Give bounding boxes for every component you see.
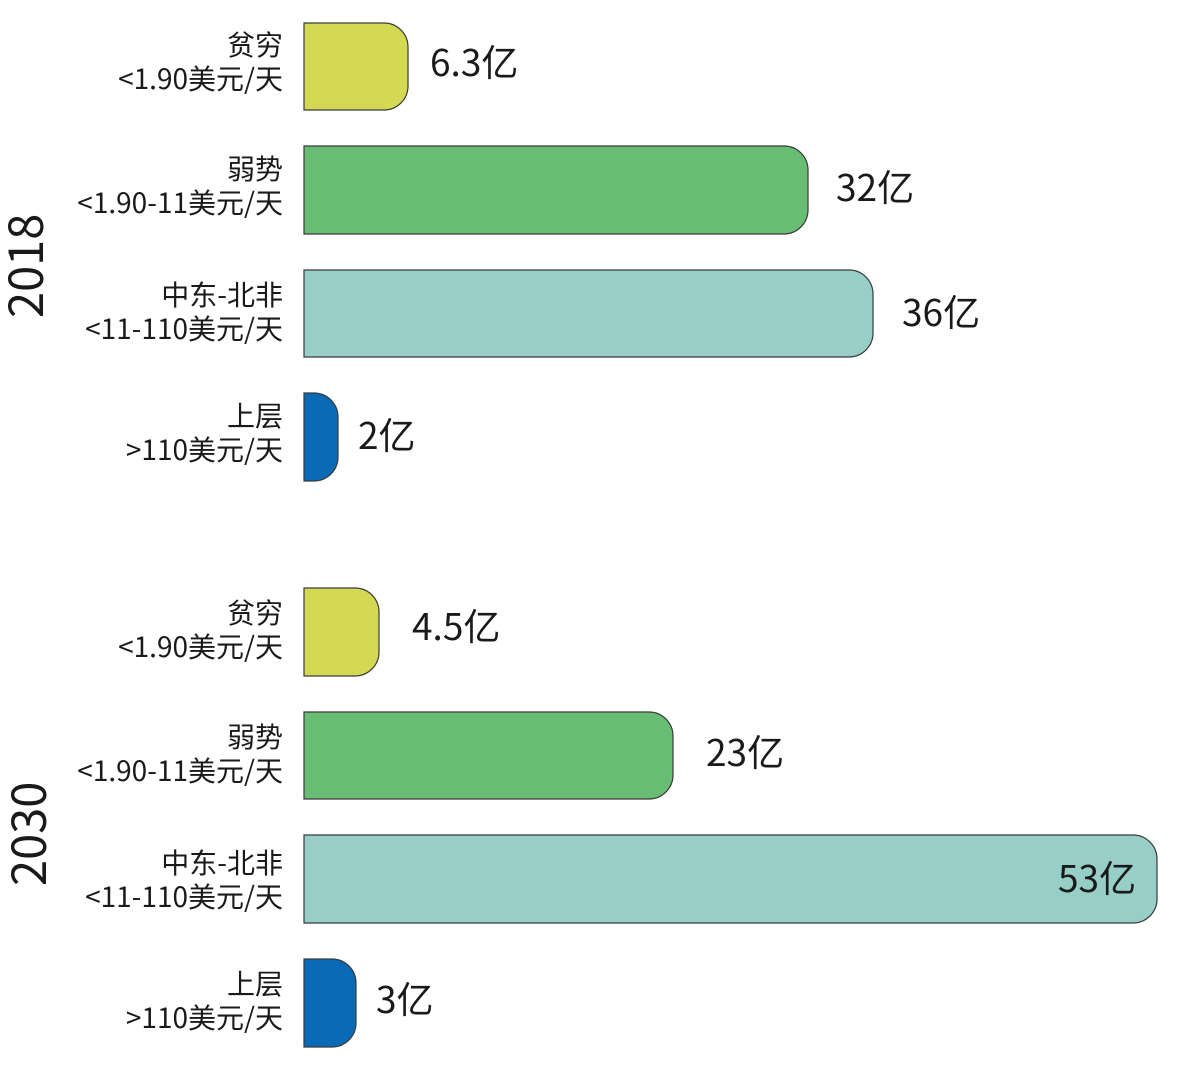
bar group: upper 2018: 2亿 [358, 406, 416, 460]
bar group: vulnerable 2030 [77, 712, 784, 799]
bar group: poor 2030: 4.5亿 [412, 597, 500, 651]
bar group: poor 2030 [118, 588, 500, 676]
bar group: upper 2030: 上层 [227, 963, 283, 1003]
bar group: vulnerable 2030: 23亿 [706, 723, 784, 777]
bar group: poor 2030: <1.90美元/天 [118, 626, 283, 666]
bar group: upper 2030: >110美元/天 [126, 997, 283, 1037]
bar group: middle 2018 [85, 270, 980, 357]
bar group: upper 2018: 上层 [227, 395, 283, 435]
bar group: middle 2018: <11-110美元/天 [85, 308, 283, 348]
bar group: poor 2018: 贫穷 [227, 24, 283, 64]
bar group: upper 2018: >110美元/天 [126, 429, 283, 469]
bar group: poor 2018: <1.90美元/天 [118, 58, 283, 98]
bar group: upper 2030: 3亿 [376, 970, 434, 1024]
bar group: poor 2018: 6.3亿 [430, 33, 518, 87]
bar group: middle 2018: 36亿 [902, 283, 980, 337]
bar group: upper 2018 [126, 393, 416, 481]
bar group: poor 2018 [118, 23, 518, 110]
bar group: middle 2030 [85, 835, 1157, 923]
bar group: vulnerable 2030: 弱势 [227, 716, 283, 756]
bar group: middle 2030: 中东-北非 [161, 842, 283, 882]
bar group: upper 2030 [126, 959, 434, 1047]
bar group: middle 2018: 中东-北非 [161, 274, 283, 314]
bar group: vulnerable 2018: <1.90-11美元/天 [77, 182, 283, 222]
bar group: poor 2030: 贫穷 [227, 592, 283, 632]
bar group: vulnerable 2018 [77, 146, 914, 234]
bar group: vulnerable 2018: 弱势 [227, 148, 283, 188]
bar group: vulnerable 2018: 32亿 [836, 158, 914, 212]
bar group: vulnerable 2030: <1.90-11美元/天 [77, 750, 283, 790]
bar group: middle 2030: <11-110美元/天 [85, 876, 283, 916]
bar group: middle 2030: 53亿 [1058, 849, 1136, 903]
